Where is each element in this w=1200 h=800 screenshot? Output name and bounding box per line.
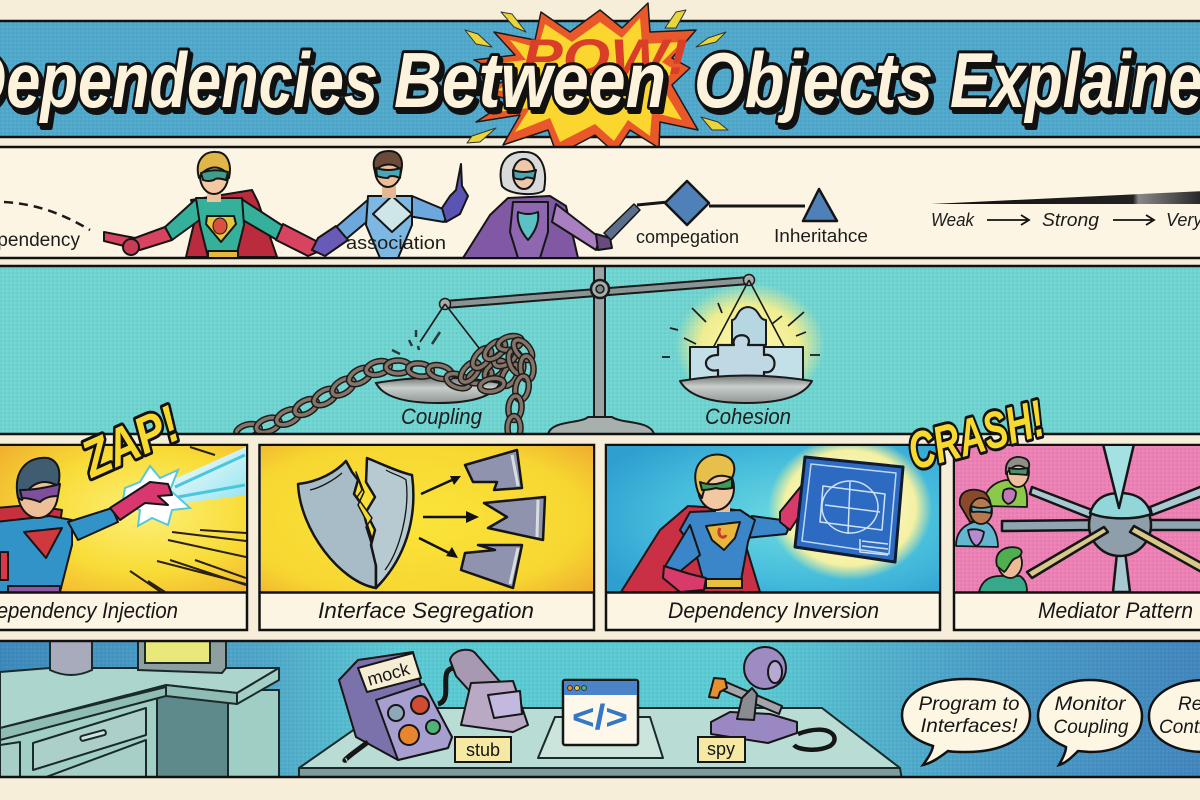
panel: coupling vs cohesion balance [0,266,1200,440]
icon: spy device [709,647,835,750]
sound effect: ZAP: ZAP! [72,395,188,490]
hero: blue with purple mask [0,458,172,594]
impact star [122,466,190,526]
speed lines [130,447,246,592]
panel: relationship heroes strip [0,147,1200,258]
blueprint glow [768,436,932,580]
speech bubble: reduce [1149,680,1200,752]
stub tag [455,737,511,762]
inheritance label: Inheritahce [774,226,868,246]
sound effect: CRASH: CRASH! [902,390,1050,482]
comic burst: POW: POW! [522,29,688,85]
speech bubble: program to interfaces: Program to [918,694,1020,715]
caption: Dependency Inversion [668,598,879,623]
icon: mock device [339,652,452,760]
inheritance triangle [803,189,837,221]
coupling strength scale [931,191,1200,230]
spy tag: spy [707,739,735,759]
speech bubble: monitor coupling [1038,680,1142,765]
panel: mediator pattern [954,444,1200,630]
cabinets [0,668,279,780]
title text: Between [394,36,666,124]
coupling strength scale: Weak [931,210,975,230]
icon: blueprint sheet [795,457,903,562]
panel: testing lab bench [0,638,1200,780]
coupling pan and chain [235,330,536,440]
dependency dashed arrow [4,202,90,230]
mediator hub and spokes [1002,444,1200,592]
icon: canister [50,638,92,675]
comic burst: POW [465,3,728,155]
panel: dependency injection [0,445,248,630]
hero: purple [463,152,612,258]
coupling label: Coupling [401,404,483,429]
stub tag: stub [466,740,500,760]
panel: dependency inversion [606,436,940,630]
speech bubble: monitor coupling: Coupling [1054,717,1129,738]
title text [0,36,1200,124]
cohesion pan and puzzle [662,303,820,403]
title text: Objects [694,36,933,124]
speech bubble: program to interfaces [902,679,1030,765]
lab bench frame [0,641,1200,777]
icon: mock device: mock [365,658,413,690]
caption: Mediator Pattern [1038,598,1193,623]
cohesion label: Cohesion [705,404,791,429]
person: bottom [979,547,1027,592]
hero: blonde with blueprint [621,454,812,592]
balance scale stand [420,266,787,434]
icon: code window [563,680,638,745]
icon: shield fragments [461,450,545,588]
energy beam [171,446,246,503]
hero: blue [312,151,468,258]
lab table [299,708,902,780]
spy tag [698,737,745,762]
person: top [983,457,1029,507]
speech bubble: program to interfaces: Interfaces! [920,716,1018,737]
icon: cracked shield [298,458,413,588]
coupling strength scale: Strong [1042,210,1099,230]
cohesion glow [675,283,825,407]
icon: code window: </> [572,698,628,737]
arrows: split outward [419,476,479,558]
person: middle [956,490,998,547]
title banner [0,3,1200,155]
icon: lab monitor [138,638,226,673]
speech bubble: monitor coupling: Monitor [1054,694,1126,715]
composition label: compegation [636,227,739,247]
panel: interface segregation [260,445,594,630]
caption: Interface Segregation [318,598,534,623]
association label: association [346,233,446,253]
icon: stub device [438,650,528,732]
scale panel frame [0,266,1200,434]
hero: green [104,152,322,258]
composition diamond connector [604,181,805,240]
